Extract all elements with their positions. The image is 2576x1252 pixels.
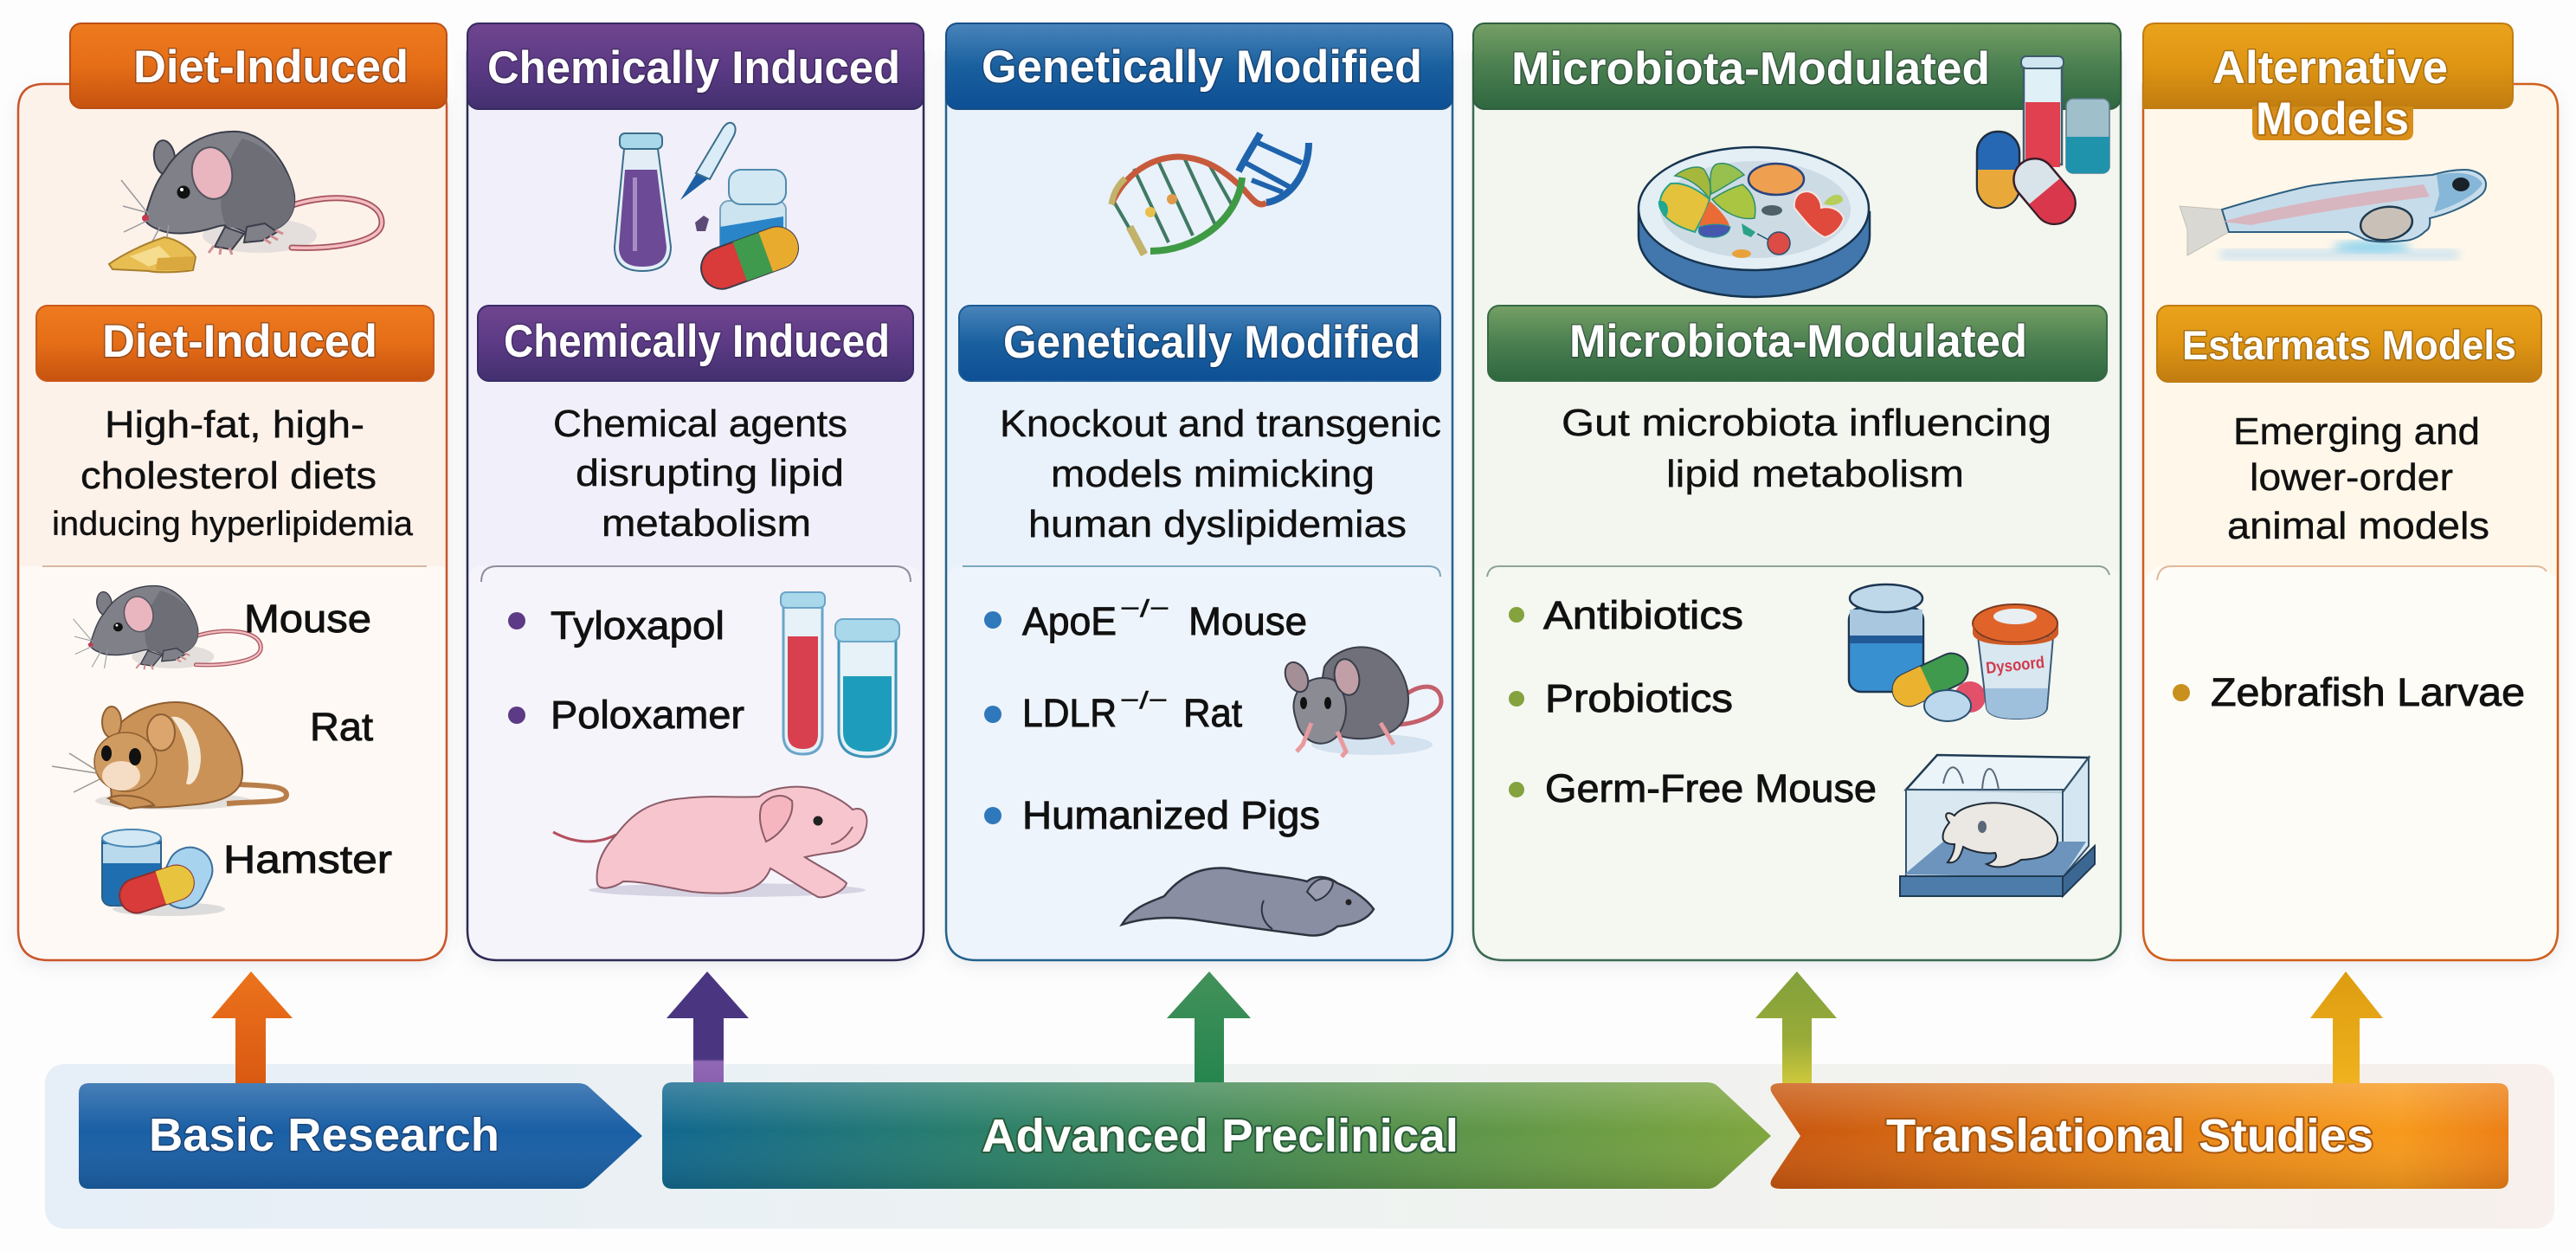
- description: microbiota: [1562, 402, 2051, 495]
- panel: genetically modified: [946, 23, 1452, 960]
- icon: small mouse: [74, 586, 261, 669]
- panel: chemically induced: [467, 23, 924, 960]
- icon: test tubes: [781, 592, 899, 757]
- timeline band: [45, 1064, 2554, 1229]
- header: genetically modified: [946, 23, 1452, 109]
- description: diet: inducing hyperlipidemia: [52, 506, 413, 543]
- bullet: ApoE mouse: Mouse: [1188, 599, 1307, 643]
- subheader: microbiota-modulated: [1488, 306, 2107, 381]
- bullet: probiotics: Probiotics: [1545, 676, 1733, 720]
- icon: jar and capsule: [102, 829, 225, 918]
- stage: advanced preclinical: [662, 1082, 1771, 1189]
- description: alternative: [2227, 410, 2489, 547]
- description: diet: [52, 403, 413, 543]
- description: chemical: [553, 403, 847, 545]
- icon: gray mouse front: [1281, 647, 1441, 757]
- icon: flask, dropper, pills: [615, 123, 804, 294]
- subheader: chemically induced: Chemically Induced: [504, 316, 890, 367]
- stage: translational studies: [1771, 1083, 2508, 1189]
- description: alternative: Emerging and: [2233, 410, 2480, 453]
- description: microbiota: lipid metabolism: [1666, 453, 1964, 495]
- icon: DNA helix: [1111, 133, 1309, 255]
- description: genetic: human dyslipidemias: [1028, 503, 1407, 545]
- icon: gray pig lying: [1122, 868, 1374, 936]
- stage: translational studies: Translational Studies: [1886, 1110, 2373, 1162]
- sheet: diet lower: [20, 566, 445, 958]
- subheader: diet-induced: [36, 306, 434, 381]
- header: diet-induced: Diet-Induced: [133, 42, 409, 93]
- bullet: LDLR rat: [984, 687, 1242, 735]
- description: alternative: animal models: [2227, 505, 2489, 547]
- description: diet: High-fat, high-: [105, 403, 364, 446]
- arrow: genetically modified: [1167, 971, 1251, 1084]
- description: chemical: Chemical agents: [553, 403, 847, 445]
- stage: basic research: [79, 1083, 642, 1189]
- header: chemically induced: [467, 23, 924, 109]
- sheet: alternative lower: [2145, 566, 2556, 958]
- icon: rat: [52, 702, 287, 810]
- bullet: ApoE mouse: [984, 595, 1307, 643]
- icon: pink pig: [553, 787, 866, 897]
- subheader: microbiota-modulated: Microbiota-Modulated: [1569, 316, 2027, 367]
- header: alternative models: Alternative: [2212, 42, 2448, 94]
- panel: diet-induced: [18, 23, 447, 960]
- header: microbiota-modulated: [1473, 23, 2121, 109]
- icon: mouse with cheese: [109, 132, 382, 272]
- icon: germ-free cage with mouse: [1900, 755, 2095, 896]
- sheet: microbiota lower: [1475, 566, 2119, 958]
- description: genetic: models mimicking: [1051, 453, 1375, 495]
- subheader: genetically modified: Genetically Modified: [1003, 317, 1420, 368]
- icon: jar and pills: Dysoord: [1985, 654, 2045, 678]
- label: hamster: Hamster: [223, 837, 392, 881]
- header: genetically modified: Genetically Modified: [982, 42, 1422, 93]
- panel: alternative models: [2143, 23, 2558, 960]
- bullet: humanized pigs: Humanized Pigs: [1022, 793, 1320, 837]
- description: genetic: Knockout and transgenic: [1000, 403, 1441, 445]
- header: microbiota-modulated: Microbiota-Modulated: [1511, 43, 1990, 94]
- description: chemical: metabolism: [602, 502, 811, 545]
- description: diet: cholesterol diets: [80, 455, 377, 497]
- arrow: microbiota-modulated: [1755, 971, 1837, 1084]
- bullet: LDLR rat: Rat: [1183, 691, 1242, 735]
- bullet: LDLR rat: −/−: [1120, 687, 1168, 713]
- label: mouse: Mouse: [244, 597, 371, 641]
- header: chemically induced: Chemically Induced: [487, 42, 900, 94]
- bullet: tyloxapol: Tyloxapol: [551, 603, 724, 648]
- description: microbiota: Gut microbiota influencing: [1562, 402, 2051, 444]
- arrow: chemically induced: [667, 971, 749, 1084]
- stage: basic research: Basic Research: [149, 1109, 499, 1161]
- bullet: germ-free mouse: Germ-Free Mouse: [1545, 766, 1877, 810]
- icon: petri dish: [1639, 147, 1870, 297]
- icon: jar and pills: [1849, 584, 2058, 721]
- arrow: alternative models: [2310, 971, 2383, 1084]
- header: alternative models: Models: [2256, 94, 2409, 145]
- stage: advanced preclinical: Advanced Preclinical: [982, 1110, 1459, 1162]
- arrow: diet-induced: [211, 971, 293, 1084]
- subheader: chemically induced: [478, 306, 913, 381]
- sheet: genetic lower: [948, 566, 1451, 958]
- bullet: antibiotics: Antibiotics: [1543, 593, 1743, 637]
- header: alternative models: [2143, 23, 2513, 145]
- bullet: poloxamer: Poloxamer: [551, 693, 744, 737]
- subheader: estarmats models: [2157, 306, 2541, 382]
- label: rat: Rat: [310, 705, 374, 749]
- subheader: diet-induced: Diet-Induced: [102, 316, 377, 367]
- sheet: chemical lower: [469, 566, 922, 958]
- bullet: ApoE mouse: ApoE: [1022, 599, 1117, 643]
- bullet: LDLR rat: LDLR: [1022, 691, 1117, 735]
- icon: tube and capsules: [1977, 56, 2109, 233]
- bullet: zebrafish larvae: Zebrafish Larvae: [2211, 670, 2525, 714]
- description: chemical: disrupting lipid: [576, 452, 844, 494]
- divider line: [42, 565, 427, 567]
- subheader: estarmats models: Estarmats Models: [2182, 322, 2516, 368]
- description: genetic: [1000, 403, 1441, 545]
- panel: microbiota-modulated: [1473, 23, 2121, 960]
- description: alternative: lower-order: [2250, 456, 2453, 499]
- subheader: genetically modified: [959, 306, 1440, 381]
- header: diet-induced: [70, 23, 447, 108]
- icon: zebrafish larva: [2180, 170, 2486, 260]
- bullet: ApoE mouse: −/−: [1120, 595, 1169, 622]
